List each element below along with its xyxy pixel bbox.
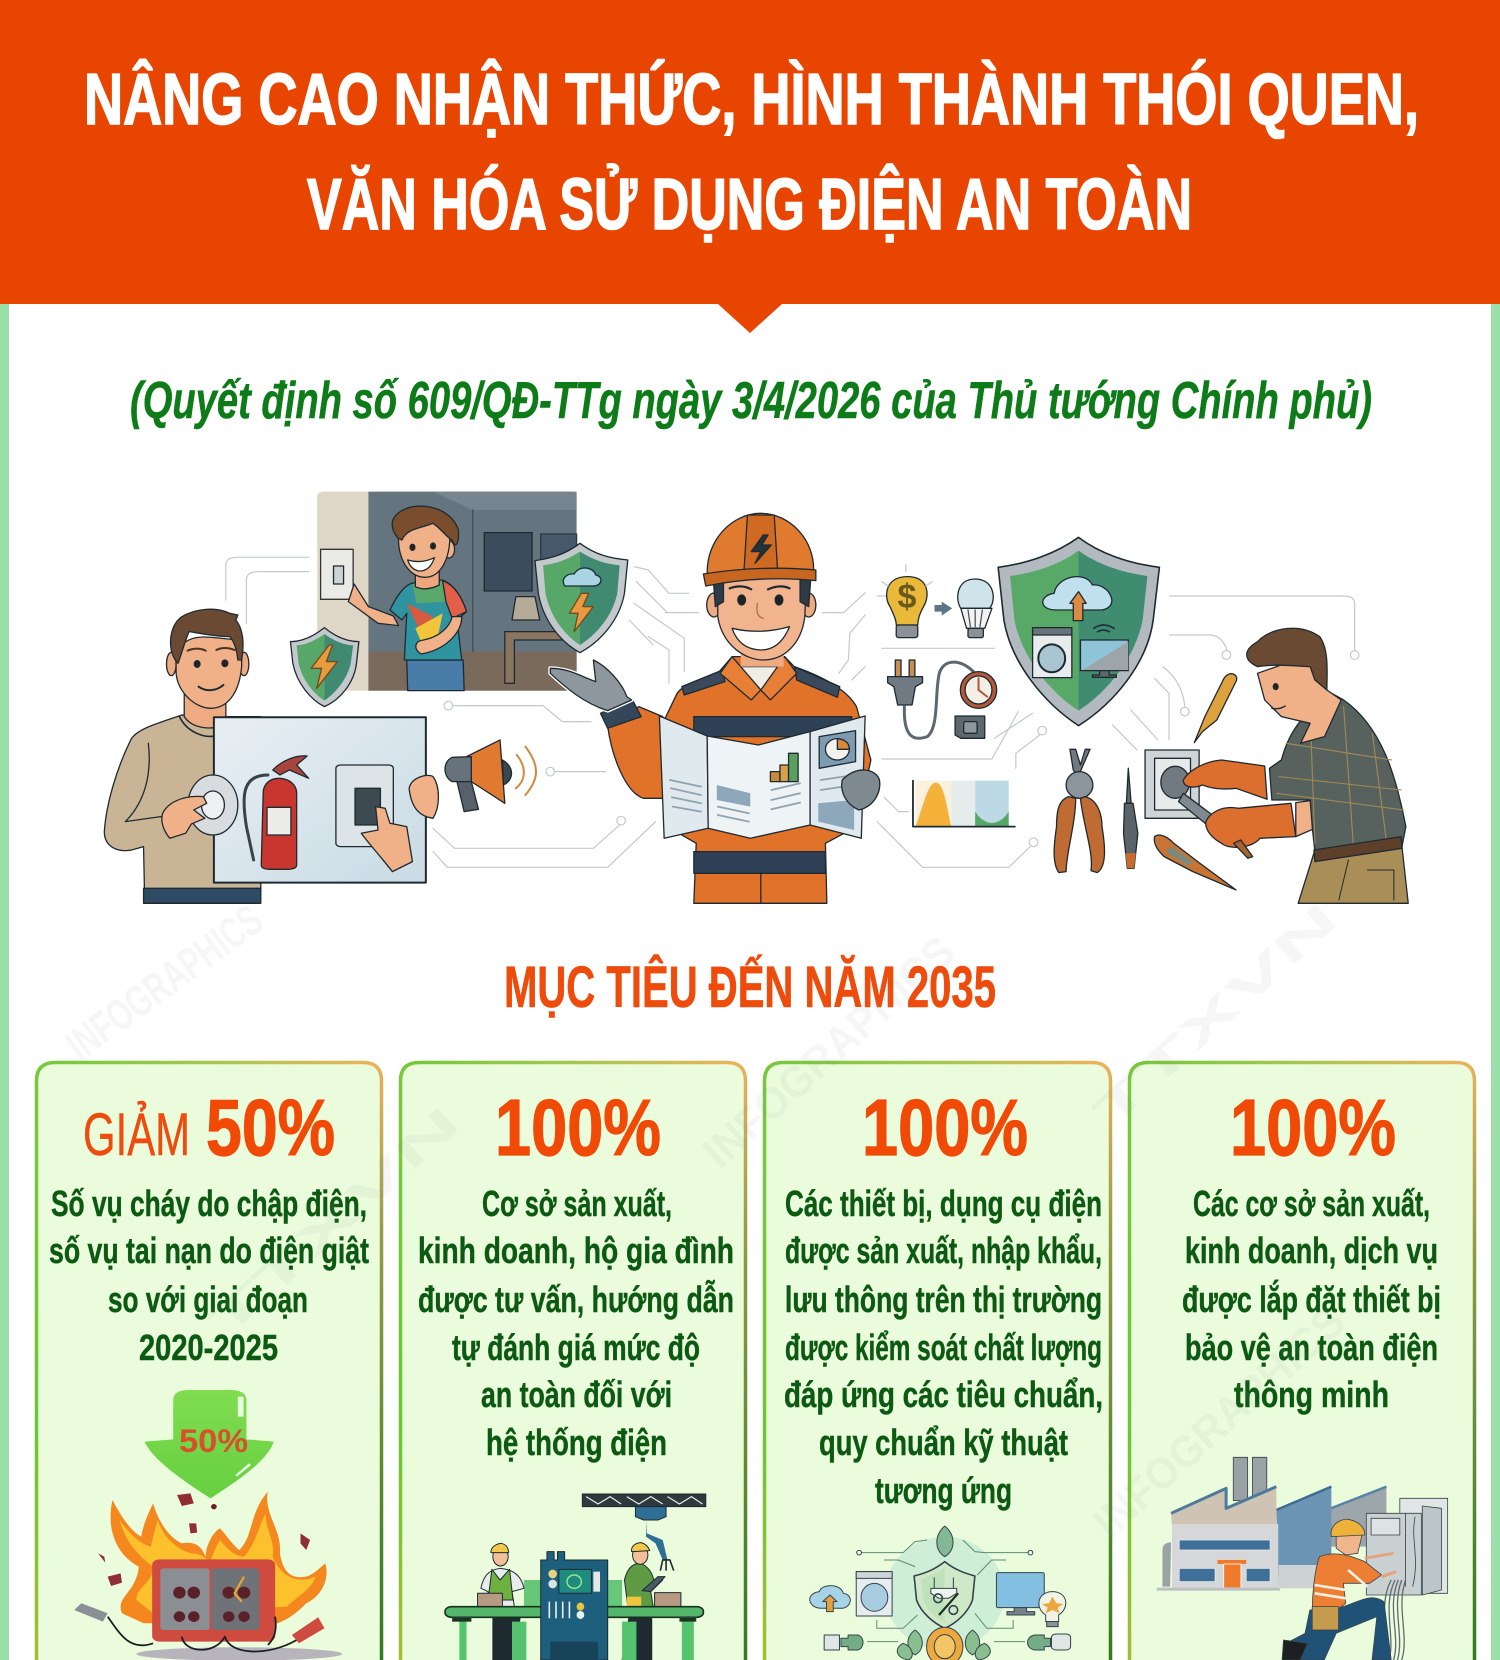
icon: megaphone xyxy=(445,740,536,812)
man holding safety panel xyxy=(104,609,438,903)
card 3 description: đáp ứng các tiêu chuẩn, xyxy=(784,1374,1103,1415)
wires xyxy=(1384,1580,1406,1660)
overhead truss and robot arm xyxy=(582,1494,706,1571)
card 2 headline: 100% xyxy=(495,1083,661,1172)
icons: outlet and plug pairs xyxy=(824,1634,1071,1650)
card 4 xyxy=(1130,1061,1474,1660)
icon: dollar bulb xyxy=(877,565,932,638)
watermarks: TTXVN xyxy=(1084,894,1347,1137)
boy at light switch scene xyxy=(317,492,577,691)
open booklet xyxy=(659,716,880,838)
icon: wall switch with finger xyxy=(336,765,412,872)
card 4 illustration: factory and electrician xyxy=(1157,1457,1448,1660)
icon: star bulb xyxy=(1039,1592,1066,1627)
icon: cloud upload xyxy=(810,1586,850,1612)
icon: screwdriver xyxy=(1124,768,1138,868)
card 3 description: tương ứng xyxy=(875,1470,1012,1511)
arrow label 50%: 50% xyxy=(179,1423,248,1459)
icon: plug and timer xyxy=(888,660,997,738)
electrical panel xyxy=(1366,1498,1448,1595)
watermarks: INFOGRAPHICS xyxy=(1084,1297,1354,1547)
icon: small shield xyxy=(290,628,359,707)
icon text: dollar sign: $ xyxy=(898,578,917,616)
card 3 description: được kiểm soát chất lượng xyxy=(785,1327,1102,1368)
card 2 xyxy=(400,1061,746,1660)
card 4 panel xyxy=(1130,1061,1474,1660)
header band with pointer xyxy=(0,0,1500,333)
card 3 panel xyxy=(764,1061,1110,1660)
watermarks: INFOGRAPHICS xyxy=(57,895,272,1070)
right side group xyxy=(822,537,1408,903)
icon: shield with plug percent xyxy=(914,1562,975,1628)
card 3 description: quy chuẩn kỹ thuật xyxy=(819,1422,1068,1463)
circuit lines right xyxy=(822,593,1359,867)
card 4 description xyxy=(1182,1183,1441,1415)
icon: fire extinguisher xyxy=(244,756,309,869)
icon: green down arrow xyxy=(145,1390,274,1498)
icon: monitor xyxy=(996,1573,1044,1615)
card 1 description xyxy=(49,1183,369,1368)
illustration: electrical safety scene xyxy=(104,492,1408,903)
boy xyxy=(348,506,467,691)
worker in orange uniform xyxy=(550,513,880,903)
card 2 description: Cơ sở sản xuất, xyxy=(482,1183,672,1224)
icon: large shield cloud bolt xyxy=(535,543,628,653)
card 1 xyxy=(36,1061,382,1660)
card 3 illustration: certified appliances xyxy=(810,1526,1071,1660)
safety panel xyxy=(162,717,438,883)
icon: burning socket xyxy=(74,1492,342,1660)
card 3 headline: 100% xyxy=(862,1083,1028,1172)
watermarks xyxy=(57,894,1354,1547)
left worker xyxy=(478,1543,524,1660)
glow and circuit lines xyxy=(857,1537,1033,1650)
electrician xyxy=(1282,1519,1396,1660)
icon: washing machine xyxy=(856,1572,892,1616)
card 3 description: lưu thông trên thị trường xyxy=(785,1279,1102,1320)
card 1 headline: GIẢM xyxy=(83,1101,190,1168)
card 1 description: số vụ tai nạn do điện giật xyxy=(49,1230,369,1271)
card 3 description: Các thiết bị, dụng cụ điện xyxy=(785,1183,1102,1224)
card 1 headline: 50% xyxy=(206,1083,335,1172)
card 4 headline: 100% xyxy=(1230,1083,1396,1172)
watermarks: INFOGRAPHICS xyxy=(694,927,964,1177)
icon: LED bulb xyxy=(958,579,993,638)
card 4 description: thông minh xyxy=(1234,1374,1389,1415)
icon: arrow xyxy=(935,602,952,616)
factory xyxy=(1157,1457,1386,1591)
card 2 description: kinh doanh, hộ gia đình xyxy=(418,1230,734,1271)
card 1 description: so với giai đoạn xyxy=(108,1279,308,1320)
icon: pliers xyxy=(1054,749,1105,873)
card 1 illustration xyxy=(74,1390,342,1660)
card 2 description: tự đánh giá mức độ xyxy=(452,1327,700,1368)
control machine xyxy=(541,1552,608,1660)
card 3 description: được sản xuất, nhập khẩu, xyxy=(785,1230,1102,1271)
card 2 description: an toàn đối với xyxy=(481,1374,672,1415)
machine background green xyxy=(524,1580,622,1607)
card 2 illustration: production line xyxy=(445,1494,706,1660)
icon: gold badge with leaves xyxy=(897,1627,990,1660)
icon: smoke alarm with hand xyxy=(162,775,238,838)
icon: big home-appliance shield xyxy=(998,537,1159,726)
card 2 description xyxy=(418,1183,734,1463)
conveyor belt xyxy=(445,1607,703,1660)
card 2 panel xyxy=(400,1061,746,1660)
circuit lines left xyxy=(226,557,699,867)
electrician man xyxy=(1179,628,1408,903)
icon: voltage tester pens xyxy=(1154,674,1237,890)
section heading: MỤC TIÊU ĐẾN NĂM 2035 xyxy=(504,955,996,1020)
card 1 headline xyxy=(83,1083,335,1172)
card 2 description: hệ thống điện xyxy=(486,1422,667,1463)
title xyxy=(84,59,1419,245)
hard hat xyxy=(703,513,816,586)
watermarks: TTXVN xyxy=(199,1097,469,1347)
card 2 description: được tư vấn, hướng dẫn xyxy=(418,1279,734,1320)
card 1 description: Số vụ cháy do chập điện, xyxy=(51,1183,367,1224)
card 3 description xyxy=(784,1183,1103,1511)
icon: wall socket xyxy=(1145,750,1199,818)
card 1 description: 2020-2025 xyxy=(139,1327,278,1368)
right worker xyxy=(622,1543,681,1660)
icon: leaf xyxy=(937,1526,953,1557)
card 1 panel xyxy=(36,1061,382,1660)
hand right xyxy=(409,775,438,818)
chart: load curve xyxy=(913,781,1015,827)
card 3 xyxy=(764,1061,1110,1660)
title: VĂN HÓA SỬ DỤNG ĐIỆN AN TOÀN xyxy=(307,164,1192,245)
